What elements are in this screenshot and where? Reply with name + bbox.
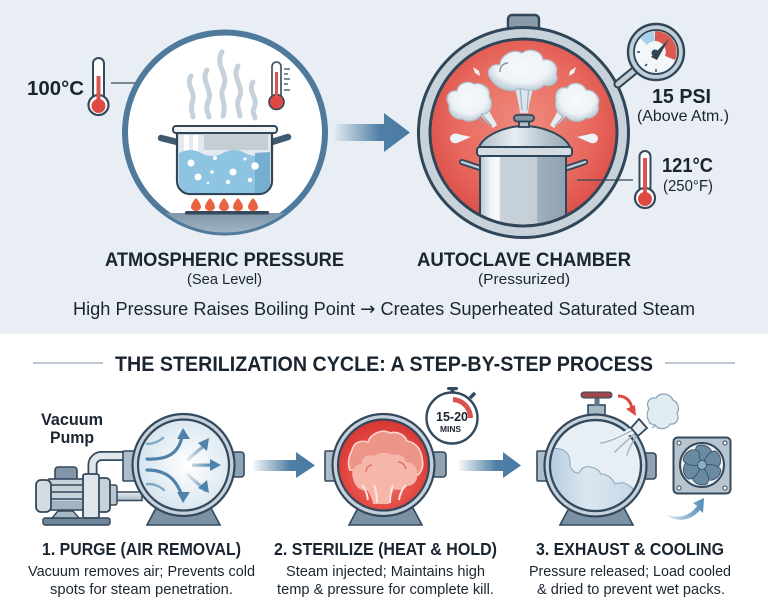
blue airflow arrow	[667, 498, 704, 520]
section title: THE STERILIZATION CYCLE: A STEP-BY-STEP PROCESS	[115, 353, 653, 376]
icon: inner thermometer	[269, 62, 290, 110]
100°C label: 100°C	[27, 78, 84, 100]
step 2: sterilize illustration	[325, 387, 478, 525]
chamber side tabs	[123, 451, 135, 481]
step 3 description: Pressure released; Load cooled	[529, 563, 731, 580]
top knob	[508, 15, 539, 31]
arrow: step 1 to 2	[253, 452, 315, 478]
exhaust nozzle and jets	[601, 413, 661, 455]
step 3: exhaust illustration	[537, 392, 730, 525]
icon: timer 15-20 mins: 15-20	[436, 410, 468, 424]
icon: boiling pot	[161, 126, 288, 194]
chamber ring	[418, 28, 628, 238]
steam clouds	[447, 50, 599, 121]
heading: autoclave chamber: AUTOCLAVE CHAMBER	[417, 249, 631, 271]
valve	[581, 392, 612, 415]
above atmosphere label: (Above Atm.)	[637, 108, 729, 125]
arrow: step 2 to 3	[459, 452, 521, 478]
leader line 121°C	[577, 179, 633, 181]
step 2 heading: 2. STERILIZE (HEAT & HOLD)	[274, 539, 497, 559]
chamber body	[332, 414, 434, 516]
121°C label: 121°C	[662, 155, 713, 177]
arrow: atmospheric to autoclave	[335, 113, 410, 152]
step 2 description: Steam injected; Maintains high	[286, 563, 485, 580]
panel: autoclave chamber circle	[418, 15, 684, 240]
droplets	[450, 67, 598, 143]
15 PSI label: 15 PSI	[652, 86, 711, 108]
gauge	[618, 24, 684, 84]
step 1 description: spots for steam penetration.	[50, 581, 233, 598]
chamber foot	[349, 508, 422, 525]
sea level note: (Sea Level)	[187, 271, 262, 288]
250°F label: (250°F)	[663, 178, 713, 195]
icon: outer thermometer 100°C	[88, 58, 108, 115]
air flow outward arrows	[187, 444, 217, 491]
steam wisps	[189, 52, 255, 118]
heading: atmospheric pressure: ATMOSPHERIC PRESSURE	[105, 249, 344, 271]
icon: flames	[191, 198, 258, 211]
vacuum pump label: Vacuum	[41, 411, 103, 429]
chamber body	[132, 414, 234, 516]
chamber foot	[560, 508, 633, 525]
panel: pressure comparison background	[0, 0, 768, 334]
panel: atmospheric pressure circle	[120, 32, 330, 243]
icon: timer 15-20 mins	[426, 387, 478, 444]
pressurized note: (Pressurized)	[478, 271, 570, 288]
summary line: High Pressure Raises Boiling Point → Creates Superheated Saturated Steam	[73, 298, 695, 320]
step 3 heading: 3. EXHAUST & COOLING	[536, 539, 724, 559]
icon: thermometer 121°C	[635, 151, 655, 208]
exhaust cloud	[647, 394, 678, 429]
icon: cooling fan	[674, 438, 730, 494]
chamber foot	[147, 508, 220, 525]
vacuum pump label: Pump	[50, 429, 94, 447]
step 2 description: temp & pressure for complete kill.	[277, 581, 494, 598]
steam jets	[478, 88, 568, 128]
leader line	[111, 82, 180, 84]
step 3 description: & dried to prevent wet packs.	[537, 581, 725, 598]
chamber body	[544, 414, 646, 516]
icon: timer 15-20 mins: MINS	[440, 425, 462, 434]
steam cloud inside	[349, 431, 423, 504]
pipes	[92, 456, 142, 500]
residual steam	[551, 448, 634, 510]
ground and burner	[166, 211, 284, 232]
red release arrow	[618, 396, 636, 416]
step 1 heading: 1. PURGE (AIR REMOVAL)	[42, 539, 241, 559]
air flow curves	[147, 437, 182, 496]
icon: vacuum pump	[36, 467, 117, 525]
step 1: purge illustration	[36, 414, 244, 525]
chamber side tabs	[537, 451, 549, 481]
chamber side tabs	[325, 451, 336, 481]
icon: pressure vessel pot	[462, 115, 585, 240]
step 1 description: Vacuum removes air; Prevents cold	[28, 563, 255, 580]
air flow arrowheads	[177, 428, 221, 503]
